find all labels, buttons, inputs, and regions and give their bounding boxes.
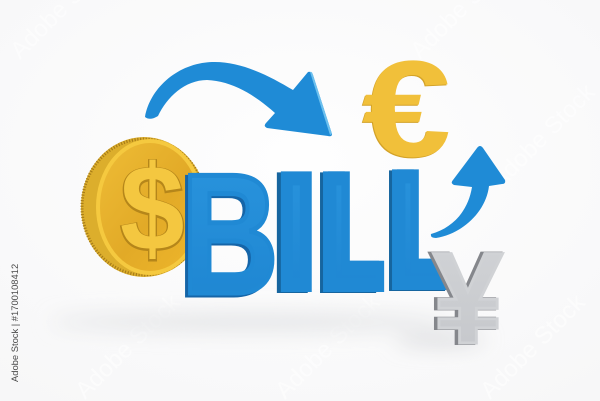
second letter L: L: [390, 144, 447, 317]
coin face: [96, 139, 204, 275]
second letter L: L: [387, 145, 444, 318]
dollar sign: $: [120, 141, 184, 278]
icon: upward arrow: [431, 146, 505, 238]
first letter L: L: [326, 146, 383, 319]
icon: yen symbol: ¥: [430, 226, 500, 371]
second letter L: L: [395, 144, 452, 317]
first letter L: L: [321, 146, 378, 319]
icon: dollar coin: $: [120, 140, 184, 277]
watermarks: Adobe Stock: [485, 78, 600, 194]
word BILL: [178, 139, 452, 332]
letter B: B: [181, 139, 279, 330]
letter I: I: [278, 146, 315, 318]
icon: curved arrow to euro: [145, 62, 332, 136]
icon: yen symbol: ¥: [433, 226, 503, 371]
first letter L: L: [318, 147, 375, 320]
watermarks: Adobe Stock: [475, 288, 591, 401]
coin edge: [81, 137, 207, 277]
letter I: I: [274, 147, 311, 319]
watermarks: Adobe Stock: [270, 288, 386, 401]
watermarks: Adobe Stock: [70, 288, 186, 401]
icon: dollar coin: [81, 137, 207, 278]
ground shadow: [50, 313, 485, 346]
icon: euro symbol: €: [361, 33, 450, 186]
icon: euro symbol: €: [362, 32, 451, 185]
letter B: B: [178, 141, 276, 332]
stock id caption: Adobe Stock | #1700108412: [9, 264, 20, 382]
